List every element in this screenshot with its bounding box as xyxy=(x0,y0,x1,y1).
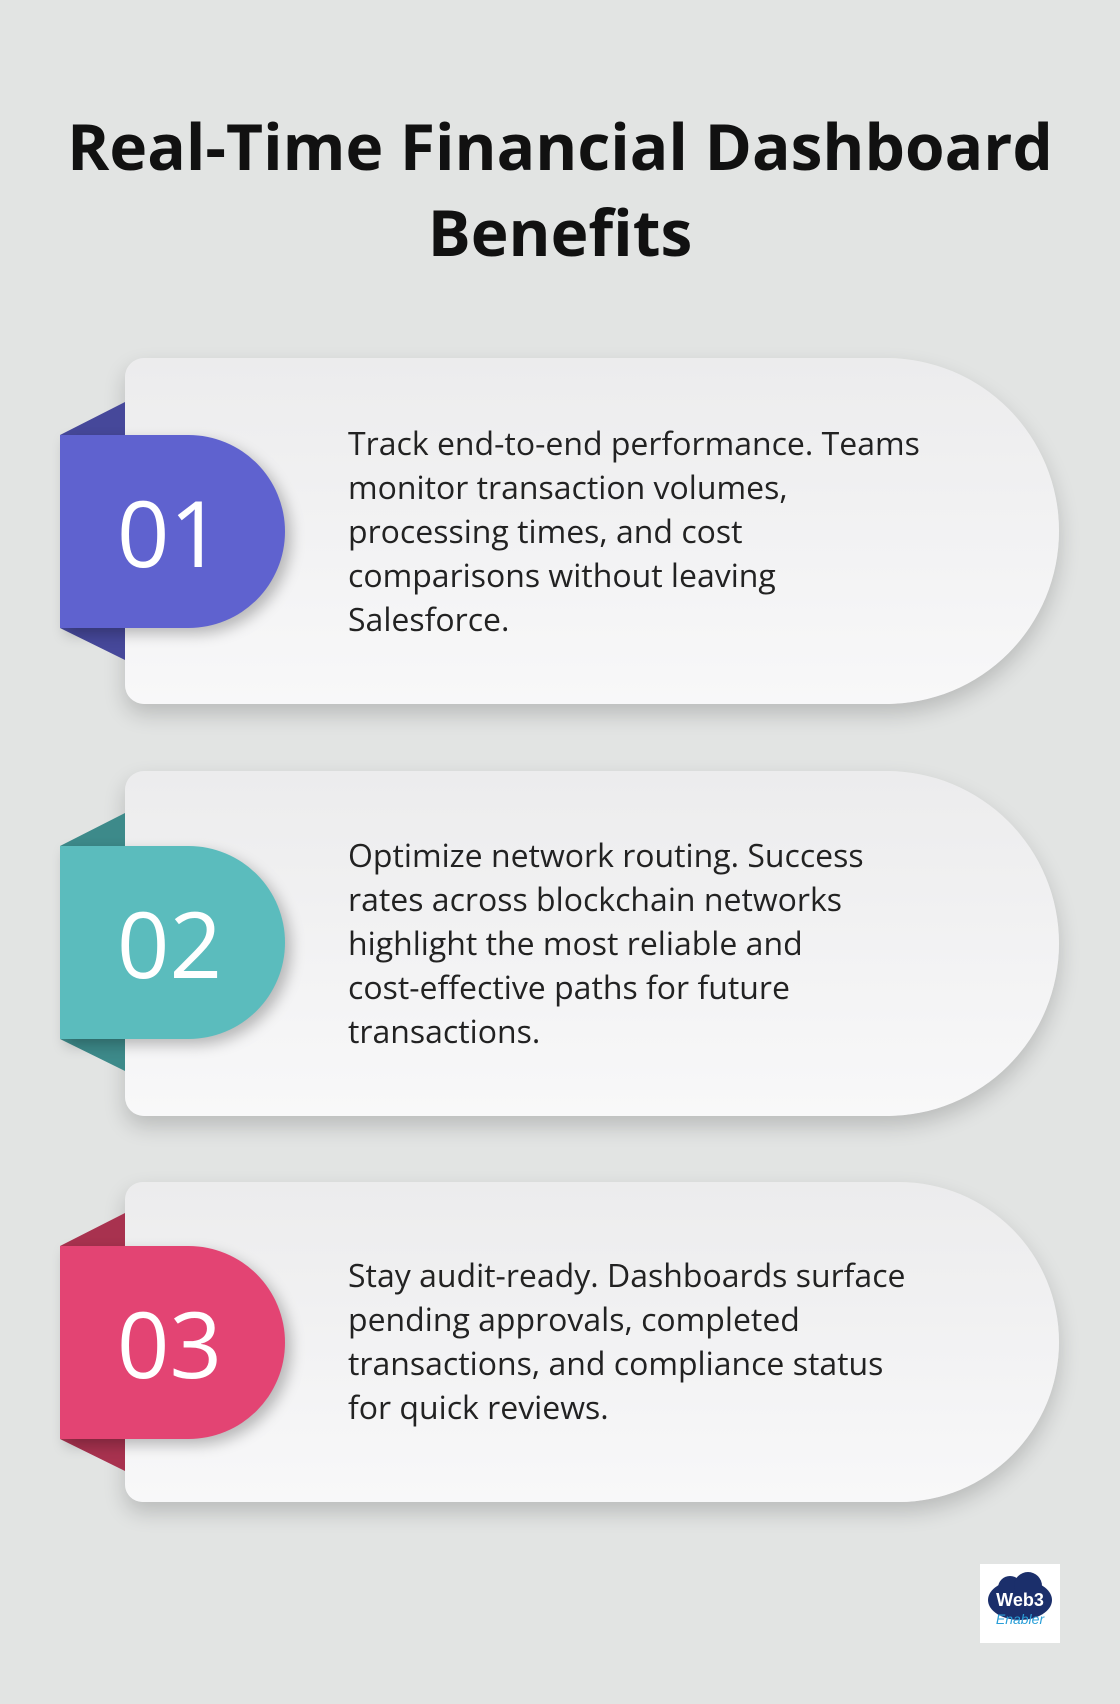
flaps 02 xyxy=(60,813,125,1071)
text 02: cost-effective paths for future xyxy=(348,966,790,1009)
logo: Web3 xyxy=(996,1590,1044,1610)
flaps 01 xyxy=(60,402,125,660)
text 02: transactions. xyxy=(348,1010,540,1053)
text 01: monitor transaction volumes, xyxy=(348,466,788,509)
text 03: pending approvals, completed xyxy=(348,1298,800,1341)
badge 01 xyxy=(60,435,285,628)
logo xyxy=(980,1564,1060,1643)
badge 02: 02 xyxy=(117,880,222,1005)
logo: Enabler xyxy=(996,1611,1045,1627)
text 01 xyxy=(348,422,920,641)
panel: item 02 xyxy=(58,771,1068,1135)
text 01: processing times, and cost xyxy=(348,510,743,553)
panel: item 01 xyxy=(58,358,1068,723)
text 02: rates across blockchain networks xyxy=(348,878,842,921)
badge 02 xyxy=(60,846,285,1039)
text 02 xyxy=(348,834,864,1053)
card 01 xyxy=(125,358,1059,704)
flaps 03 xyxy=(60,1213,125,1471)
panel: item 03 xyxy=(58,1182,1068,1521)
text 01: comparisons without leaving xyxy=(348,554,776,597)
text 03: for quick reviews. xyxy=(348,1386,609,1429)
text 02: highlight the most reliable and xyxy=(348,922,803,965)
text 02: Optimize network routing. Success xyxy=(348,834,864,877)
badge 03 xyxy=(60,1246,285,1439)
card 03 xyxy=(125,1182,1059,1502)
text 01: Salesforce. xyxy=(348,598,509,641)
card 02 xyxy=(125,771,1059,1116)
badge 03: 03 xyxy=(117,1280,222,1405)
text 03 xyxy=(348,1254,906,1429)
badge 01: 01 xyxy=(117,469,222,594)
text 03: transactions, and compliance status xyxy=(348,1342,883,1385)
text 01: Track end-to-end performance. Teams xyxy=(348,422,920,465)
title xyxy=(67,102,1053,275)
title: Benefits xyxy=(428,188,692,275)
text 03: Stay audit-ready. Dashboards surface xyxy=(348,1254,906,1297)
title: Real-Time Financial Dashboard xyxy=(67,102,1053,189)
